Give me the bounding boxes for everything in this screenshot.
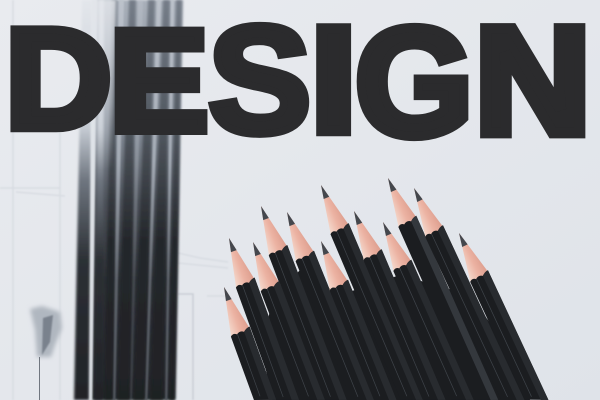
title: DESIGN: N: [475, 0, 591, 166]
pencils: [214, 174, 548, 400]
title: DESIGN: [5, 0, 591, 168]
curtain light streaks: [90, 0, 174, 400]
curtain dark folds: [94, 0, 182, 400]
blurred lamp: [30, 306, 62, 400]
curtain left band: [74, 0, 92, 400]
curtain top fade: [92, 0, 116, 170]
pencil 8: [344, 207, 446, 400]
pencil 3: [243, 238, 325, 400]
title: DESIGN: D: [5, 0, 112, 158]
pencil 5: [277, 208, 374, 400]
pencil 10: [378, 174, 498, 400]
pencil 11: [404, 184, 525, 400]
pencil 6: [311, 237, 397, 400]
curtain: [74, 0, 183, 400]
room mouldings: [0, 0, 228, 400]
pencil mass shadow: [262, 270, 530, 400]
pencil 2: [219, 234, 299, 400]
title: DESIGN: E: [110, 1, 208, 161]
pencil 9: [373, 218, 474, 400]
title: DESIGN: I: [311, 0, 356, 163]
pencil 7: [311, 181, 424, 400]
pencil 12: [449, 229, 548, 400]
curtain main folds: [92, 0, 183, 400]
title: DESIGN: G: [355, 0, 473, 168]
pencil 1: [214, 283, 276, 400]
pencil 4: [251, 202, 347, 400]
